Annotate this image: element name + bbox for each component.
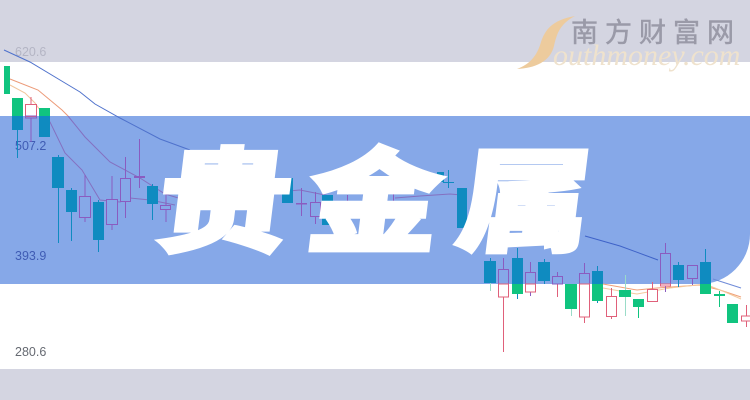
logo swoosh (517, 16, 575, 69)
candle 19 (282, 178, 293, 203)
middle moving average in band (395, 194, 462, 198)
candle 27 (457, 188, 467, 228)
axis label 507.2: 507.2 (15, 139, 46, 153)
candle 10 (120, 157, 130, 218)
candle 16 (206, 165, 207, 210)
candle 34 (565, 284, 577, 316)
candle 43 (688, 266, 698, 285)
candle 21 (310, 192, 320, 224)
blue title band (0, 116, 750, 284)
moving average lines (4, 50, 741, 299)
candle 47 (742, 305, 750, 327)
candle 36 (592, 266, 603, 303)
candle 14 (179, 180, 180, 210)
candlesticks: behind title (179, 165, 467, 228)
pale moving average above band (10, 85, 44, 116)
candle 18 (260, 170, 274, 182)
candlesticks: left cluster (4, 66, 170, 252)
lower right pale moving average (603, 284, 741, 299)
pale moving average in band (44, 116, 175, 205)
axis labels (15, 45, 46, 359)
candle 33 (552, 272, 562, 297)
candle 13 (160, 190, 170, 222)
candle 46 (727, 304, 738, 323)
candle 30 (512, 248, 523, 299)
candle 22 (322, 195, 333, 225)
candle 5 (52, 155, 64, 243)
axis label 620.6: 620.6 (15, 45, 46, 59)
candle 15 (185, 165, 199, 210)
candle 8 (93, 200, 104, 252)
blue moving average, left (4, 50, 190, 150)
orange moving average in band (68, 116, 330, 200)
candle 1 (4, 66, 10, 94)
blue moving average, far right (713, 279, 741, 288)
title: 贵金属 (149, 111, 619, 275)
orange moving average above band (10, 79, 68, 116)
candle 7 (80, 175, 90, 222)
candle 45 (714, 291, 725, 307)
candle 38 (619, 275, 631, 316)
candle 44 (700, 249, 711, 294)
candle 17 (241, 180, 252, 207)
candle 35 (580, 263, 590, 323)
candle 39 (633, 299, 644, 318)
candle 31 (526, 262, 536, 296)
candle 20 (296, 188, 307, 216)
candle 2 (12, 98, 23, 158)
logo latin name: outhmoney.com (553, 39, 740, 72)
lower right moving average (603, 284, 741, 297)
candle 12 (147, 184, 158, 220)
candlesticks: right cluster (484, 243, 750, 352)
top gray band (0, 0, 750, 62)
candle 23 (347, 195, 348, 225)
candle 11 (134, 139, 145, 188)
axis label 393.9: 393.9 (15, 249, 46, 263)
candle 24 (393, 175, 394, 205)
bottom gray band (0, 369, 750, 400)
logo chinese name: 南方财富网 (571, 11, 741, 50)
candle 28 (484, 258, 496, 291)
candle 4 (39, 108, 50, 137)
blue moving average, right (585, 236, 658, 260)
candle 3 (26, 97, 36, 142)
candle 41 (660, 243, 670, 292)
candle 26 (443, 170, 454, 188)
candle 9 (106, 176, 118, 230)
candle 42 (673, 262, 684, 287)
candle 6 (66, 188, 77, 241)
logo: southmoney (517, 11, 741, 72)
candle 29 (498, 258, 508, 352)
candle 32 (538, 259, 550, 284)
candle 40 (648, 282, 658, 302)
candle 25 (437, 172, 444, 182)
axis label 280.6: 280.6 (15, 345, 46, 359)
candle 37 (606, 288, 616, 319)
